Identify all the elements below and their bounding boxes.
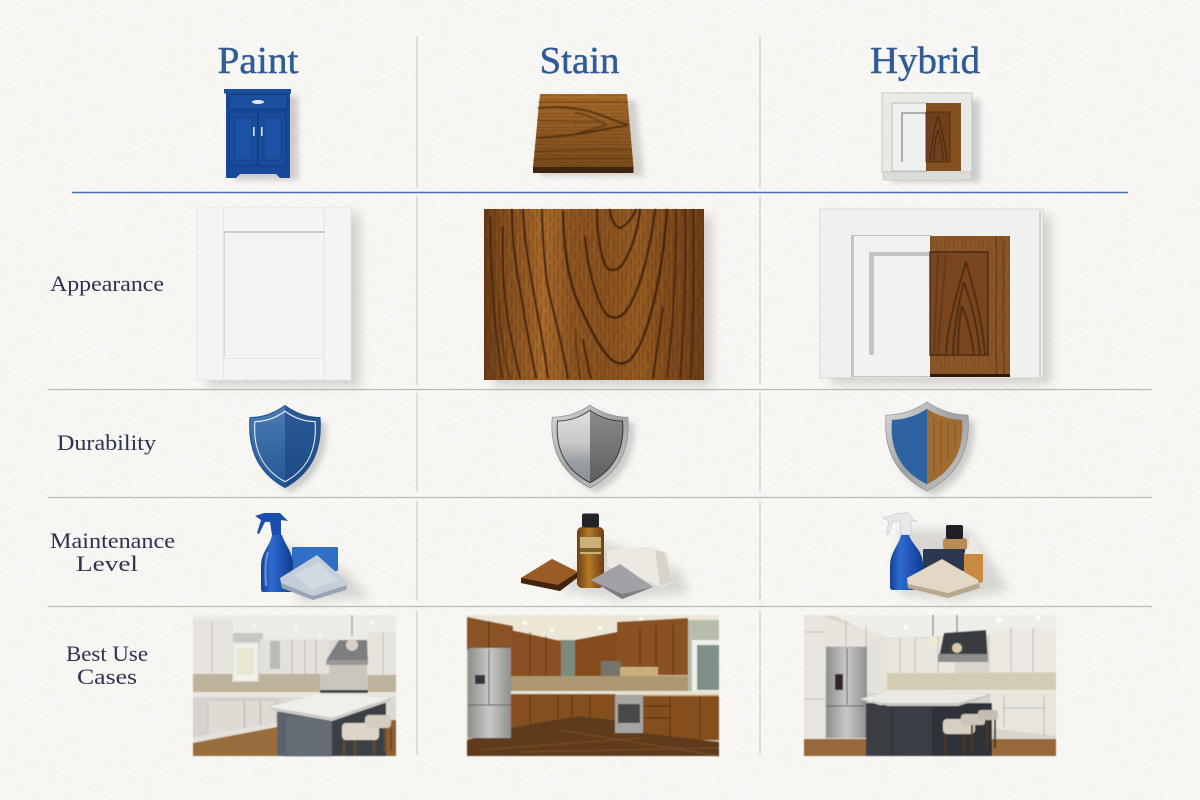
row label: Durability: Durability — [57, 430, 156, 455]
icon: blue shield — [250, 406, 326, 492]
photo: stained wood kitchen — [467, 615, 719, 756]
icon: hybrid half painted cabinet door — [882, 93, 980, 182]
row label: Maintenance Level: Maintenance — [50, 528, 175, 553]
icon: stained wood sample — [533, 94, 644, 176]
row label: Best Use Cases: Best Use — [66, 641, 148, 666]
row label: Maintenance Level — [50, 528, 175, 576]
swatch: hybrid half paint half stain door — [820, 209, 1051, 384]
swatch: painted white shaker door — [197, 208, 360, 386]
icon: stain care supplies — [521, 514, 690, 600]
photo: hybrid white and dark island kitchen — [804, 615, 1056, 756]
icon: paint cleaning supplies — [255, 513, 370, 602]
row label: Best Use Cases — [66, 641, 148, 689]
row label: Maintenance Level: Level — [76, 551, 138, 576]
icon: steel shield — [552, 405, 634, 493]
row label: Appearance: Appearance — [50, 271, 164, 296]
photo: white painted kitchen — [193, 615, 396, 756]
heading: Hybrid: Hybrid — [870, 40, 980, 82]
heading: Paint: Paint — [218, 40, 299, 82]
heading: Stain: Stain — [540, 40, 620, 82]
row label: Best Use Cases: Cases — [77, 664, 137, 689]
swatch: stained wood grain panel — [484, 209, 712, 386]
icon: blue painted cabinet — [224, 89, 298, 180]
icon: hybrid blue and wood shield — [886, 402, 974, 496]
icon: hybrid cleaning supplies — [883, 513, 1010, 600]
